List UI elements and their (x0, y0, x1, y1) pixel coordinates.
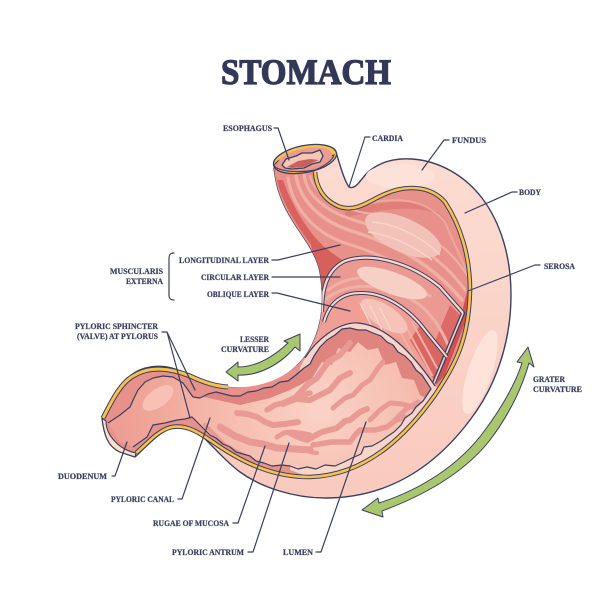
arrow: lesser curvature (226, 334, 300, 381)
mucosa lumen (108, 327, 432, 470)
stomach illustration (90, 140, 511, 498)
serosa yellow line (103, 172, 470, 477)
labels: LESSER (240, 334, 270, 344)
infographic: stomach anatomy (58, 60, 582, 556)
oblique layer (306, 298, 447, 379)
bracket: muscularis externa (169, 253, 174, 300)
labels: GRATER (533, 374, 566, 384)
longitudinal layer (103, 168, 468, 474)
highlight: longitudinal layer (365, 212, 441, 258)
labels (58, 123, 582, 557)
labels: CURVATURE (533, 384, 582, 394)
band: circular layer edge (322, 258, 463, 383)
labels: PYLORIC CANAL (111, 494, 174, 504)
labels: LONGITUDINAL LAYER (179, 255, 270, 265)
labels: BODY (519, 187, 542, 197)
labels: CURVATURE (221, 344, 269, 354)
circular layer (301, 260, 460, 362)
labels: SEROSA (544, 261, 576, 271)
labels: EXTERNA (126, 276, 164, 286)
labels: RUGAE OF MUCOSA (153, 518, 230, 528)
labels: MUSCULARIS (110, 266, 163, 276)
title: STOMACH (221, 52, 391, 92)
esophagus opening (271, 140, 339, 178)
band: oblique layer edge (324, 293, 447, 357)
labels: FUNDUS (452, 135, 486, 145)
duodenum highlight (142, 385, 174, 411)
highlight: circular layer (357, 266, 427, 300)
leader lines (112, 128, 540, 552)
labels: PYLORIC SPHINCTER (75, 321, 159, 331)
arrow: greater curvature (362, 347, 534, 517)
dark rim of mucosa (204, 328, 430, 405)
outer stomach wall (102, 152, 511, 498)
labels: (VALVE) AT PYLORUS (77, 331, 158, 341)
rugae folds (205, 343, 418, 456)
labels: ESOPHAGUS (223, 123, 272, 133)
highlight: oblique layer (360, 298, 408, 334)
labels: DUODENUM (58, 471, 107, 481)
labels: LUMEN (283, 547, 314, 557)
duodenum end cap (102, 418, 136, 457)
band: pale lining around lumen (290, 323, 440, 477)
labels: CIRCULAR LAYER (201, 272, 270, 282)
wall highlight: body (455, 326, 505, 418)
wall highlight: fundus (366, 164, 434, 188)
muscle interior (103, 168, 468, 474)
mucosa outline (108, 328, 431, 469)
labels: OBLIQUE LAYER (207, 289, 270, 299)
labels: CARDIA (372, 133, 404, 143)
labels: PYLORIC ANTRUM (172, 547, 244, 557)
